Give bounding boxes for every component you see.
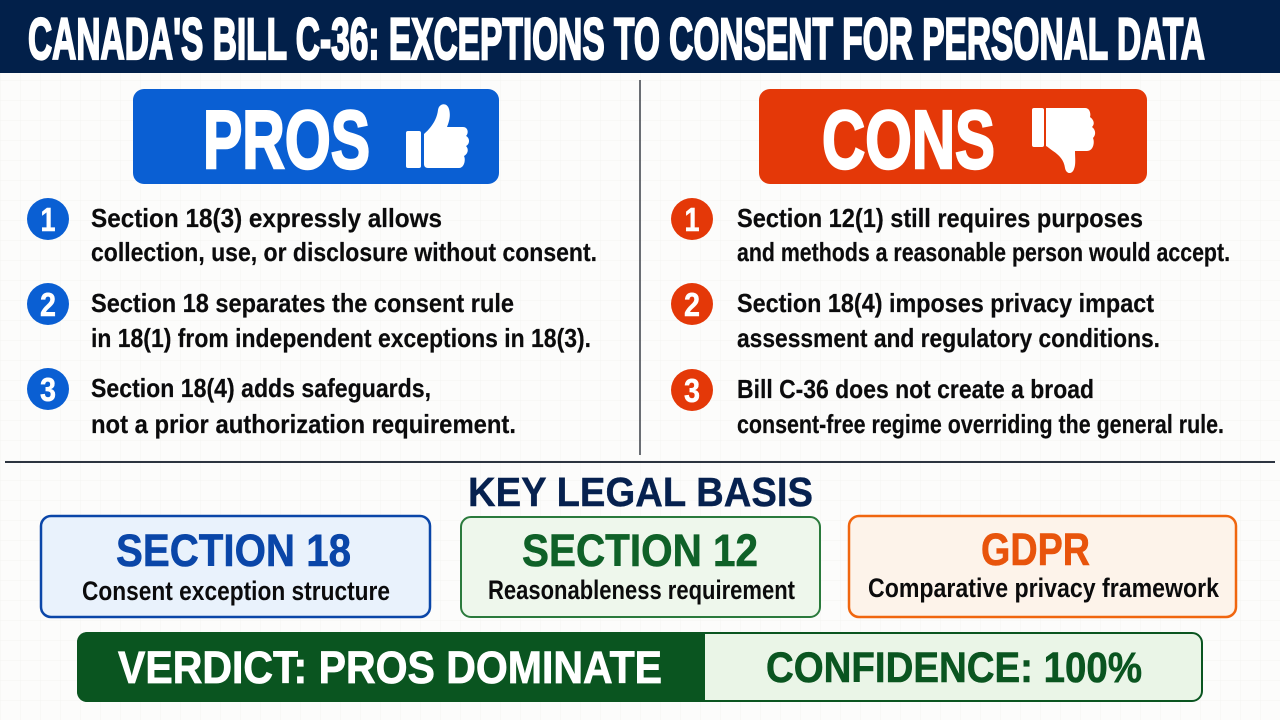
pros header: [133, 89, 499, 186]
card: section 18: Consent exception structure: [82, 576, 390, 606]
title banner: [0, 0, 1280, 73]
cons item 2: [671, 283, 1160, 353]
cons item 3: [671, 369, 1224, 439]
pros item 3: [27, 368, 516, 439]
verdict bar: [77, 632, 1202, 702]
pros item 2: in 18(1) from independent exceptions in 18(3).: [91, 323, 591, 353]
cons item 1: [671, 198, 1230, 267]
pros header: PROS: [203, 93, 370, 186]
cons header: CONS: [822, 93, 995, 186]
cons item 3: Bill C-36 does not create a broad: [737, 374, 1094, 404]
heading: key legal basis: KEY LEGAL BASIS: [468, 469, 813, 515]
pros item 3: not a prior authorization requirement.: [91, 409, 516, 439]
cons item 3: 3: [684, 372, 700, 409]
cons item 2: Section 18(4) imposes privacy impact: [737, 288, 1154, 318]
panel: cons: [671, 89, 1230, 439]
cons item 1: Section 12(1) still requires purposes: [737, 203, 1143, 233]
cons item 2: assessment and regulatory conditions.: [737, 323, 1160, 353]
pros item 2: 2: [40, 286, 56, 323]
card: section 18: [41, 516, 430, 617]
pros item 1: Section 18(3) expressly allows: [91, 203, 442, 233]
pros item 2: [27, 283, 591, 353]
pros item 1: collection, use, or disclosure without consent.: [91, 237, 597, 267]
cons header: [759, 89, 1147, 186]
cons item 1: 1: [684, 201, 700, 238]
card: gdpr: [849, 516, 1236, 617]
pros item 1: 1: [40, 201, 56, 238]
pros item 2: Section 18 separates the consent rule: [91, 288, 514, 318]
card: section 12: SECTION 12: [522, 525, 758, 576]
card: gdpr: GDPR: [981, 524, 1090, 575]
card: section 18: SECTION 18: [116, 525, 351, 576]
cons item 2: 2: [684, 286, 700, 323]
pros item 1: [27, 198, 597, 267]
confidence text: CONFIDENCE: 100%: [766, 644, 1142, 692]
verdict text: VERDICT: PROS DOMINATE: [118, 642, 662, 693]
panel: pros: [27, 89, 597, 439]
card: gdpr: Comparative privacy framework: [868, 573, 1220, 603]
card: section 12: Reasonableness requirement: [488, 575, 795, 605]
pros item 3: Section 18(4) adds safeguards,: [91, 373, 431, 403]
icon: thumbs down: [1032, 108, 1095, 173]
icon: thumbs up: [406, 104, 469, 168]
pros item 3: 3: [40, 371, 56, 408]
card: section 12: [461, 517, 820, 617]
